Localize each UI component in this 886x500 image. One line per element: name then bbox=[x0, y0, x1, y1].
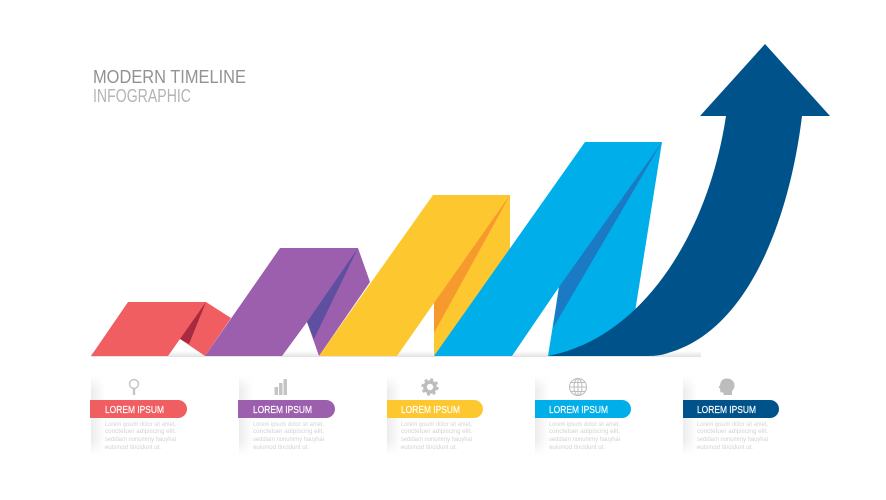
label: lorem ipsum yellow: LOREM IPSUM bbox=[401, 405, 460, 416]
baseline shadow bbox=[91, 351, 701, 357]
body text 4: euismod tincidunt ut. bbox=[549, 445, 605, 451]
purple fold segment bbox=[205, 248, 370, 356]
red fold segment bbox=[91, 302, 231, 356]
body text 5: conctetuer adipiscing elit, bbox=[697, 429, 768, 435]
step 5 card bbox=[683, 378, 779, 449]
body text 3: Lorem ipsum dolor sit amet, bbox=[401, 422, 472, 428]
title bbox=[93, 66, 246, 106]
icon: magnifier bbox=[130, 380, 138, 395]
body text 5: Lorem ipsum dolor sit amet, bbox=[697, 422, 768, 428]
label: lorem ipsum blue: LOREM IPSUM bbox=[549, 405, 608, 416]
icon: gear bbox=[422, 380, 438, 394]
title: INFOGRAPHIC bbox=[93, 86, 191, 106]
navy arrow bbox=[548, 44, 830, 356]
label: lorem ipsum navy: LOREM IPSUM bbox=[697, 405, 756, 416]
body text 3 bbox=[401, 422, 472, 451]
body text 5 bbox=[697, 422, 768, 451]
body text 1: Lorem ipsum dolor sit amet, bbox=[105, 422, 176, 428]
icon: globe bbox=[570, 378, 586, 396]
body text 2: conctetuer adipiscing elit, bbox=[253, 429, 324, 435]
body text 5: seddiam nonummy hauyhai bbox=[697, 437, 768, 443]
body text 1: euismod tincidunt ut. bbox=[105, 445, 161, 451]
body text 4: Lorem ipsum dolor sit amet, bbox=[549, 422, 620, 428]
label: lorem ipsum purple: LOREM IPSUM bbox=[253, 405, 312, 416]
body text 3: seddiam nonummy hauyhai bbox=[401, 437, 472, 443]
body text 2: Lorem ipsum dolor sit amet, bbox=[253, 422, 324, 428]
step 1 card bbox=[90, 378, 187, 449]
title: MODERN TIMELINE bbox=[93, 66, 246, 87]
body text 2: euismod tincidunt ut. bbox=[253, 445, 309, 451]
body text 4: seddiam nonummy hauyhai bbox=[549, 437, 620, 443]
icon: head bbox=[718, 378, 734, 395]
step 3 card bbox=[387, 378, 483, 449]
label: lorem ipsum red: LOREM IPSUM bbox=[105, 405, 164, 416]
body text 2: seddiam nonummy hauyhai bbox=[253, 437, 324, 443]
body text 1 bbox=[105, 422, 176, 451]
body text 4: conctetuer adipiscing elit, bbox=[549, 429, 620, 435]
body text 1: conctetuer adipiscing elit, bbox=[105, 429, 176, 435]
body text 1: seddiam nonummy hauyhai bbox=[105, 437, 176, 443]
icon: bar chart bbox=[274, 379, 287, 395]
body text 5: euismod tincidunt ut. bbox=[697, 445, 753, 451]
body text 3: conctetuer adipiscing elit, bbox=[401, 429, 472, 435]
blue fold segment bbox=[434, 142, 662, 356]
step 4 card bbox=[535, 378, 631, 449]
yellow fold segment bbox=[319, 195, 510, 356]
body text 3: euismod tincidunt ut. bbox=[401, 445, 457, 451]
step 2 card bbox=[238, 379, 335, 449]
body text 2 bbox=[253, 422, 324, 451]
body text 4 bbox=[549, 422, 620, 451]
